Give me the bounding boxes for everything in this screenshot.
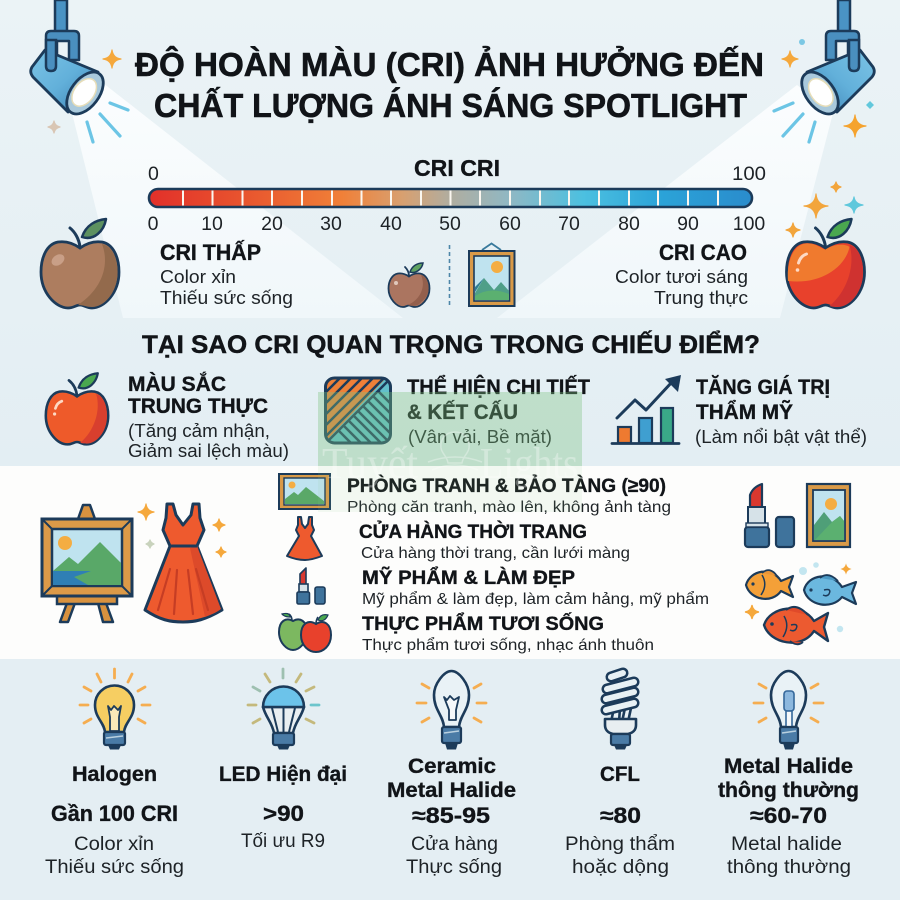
- icon: sparkles left: [48, 50, 121, 133]
- bulb: Ceramic Metal Halide: Ceramic: [408, 755, 496, 778]
- icon: blue fish: [804, 575, 856, 605]
- row: galleries and museums: [279, 473, 671, 516]
- title: [135, 45, 764, 124]
- icon: green and red apples: [279, 613, 331, 652]
- dashed divider: [448, 245, 450, 308]
- bulb: CFL: Phòng thẩm: [565, 834, 675, 855]
- icon: rising bar chart: [612, 375, 681, 444]
- bulb: Halogen: [45, 669, 184, 878]
- bulb: Ceramic Metal Halide: Metal Halide: [387, 779, 516, 802]
- scale tick labels: [148, 213, 765, 235]
- bulb: Halogen: Color xỉn: [74, 834, 154, 855]
- light beam left: [72, 83, 403, 318]
- row: galleries and museums: Phòng căn tranh, mào lên, không ảnh tàng: [347, 499, 671, 516]
- bulb: CFL: hoặc dộng: [572, 857, 669, 878]
- bulb: standard Metal Halide: ≈60-70: [750, 803, 827, 828]
- bulb: Ceramic Metal Halide: Cửa hàng: [411, 834, 498, 855]
- reason: aesthetic value text: [695, 376, 867, 447]
- background: applications band: [0, 466, 900, 659]
- icon: small lipstick set: [297, 568, 325, 604]
- icon: red fish: [764, 607, 828, 644]
- row: fashion stores: Cửa hàng thời trang, cần lưới màng: [361, 545, 630, 562]
- CRI gradient bar: [149, 189, 752, 207]
- icon: light rays right: [774, 103, 815, 142]
- icon: small dress: [287, 517, 322, 560]
- bulb: Ceramic Metal Halide: ≈85-95: [412, 803, 490, 828]
- icon: landscape frame: [279, 474, 330, 509]
- scale tick labels: 60: [499, 213, 521, 235]
- bulb: Halogen: Gần 100 CRI: [51, 801, 178, 826]
- icon: dull brown apple: [41, 219, 119, 308]
- icon: red dress: [145, 504, 222, 622]
- bulb: Ceramic Metal Halide: Thực sống: [406, 857, 502, 878]
- row: fresh food: [279, 611, 654, 654]
- icon: small apple: [388, 263, 430, 307]
- scale minimum label: 0: [148, 163, 159, 185]
- icon: painting on easel: [42, 505, 132, 622]
- high CRI text: Color tươi sáng: [615, 267, 748, 287]
- reason: detail and texture text: (Vân vải, Bề mặt): [408, 427, 552, 447]
- bulb: modern LED: >90: [263, 801, 304, 826]
- scale tick labels: 20: [261, 213, 283, 235]
- reason: true colors text: Giảm sai lệch màu): [128, 441, 289, 461]
- reason: true colors text: MÀU SẮC: [128, 372, 226, 396]
- scale tick labels: 0: [148, 213, 159, 235]
- row: fashion stores: CỬA HÀNG THỜI TRANG: [359, 519, 587, 543]
- icon: lipstick: [745, 484, 794, 547]
- icon: easel sparkles: [138, 504, 226, 557]
- icon: portrait frame: [807, 484, 850, 547]
- low CRI text: [160, 240, 293, 308]
- background: bulb comparison panel: [0, 659, 900, 900]
- row: fresh food: THỰC PHẨM TƯƠI SỐNG: [362, 611, 604, 635]
- bulb: standard Metal Halide: Metal halide: [731, 834, 842, 855]
- watermark: Tuyết Lights: Lights: [480, 439, 578, 488]
- icon: LED bulb: [248, 669, 319, 750]
- icon: sparkles right: [782, 39, 874, 137]
- icon: texture swatch: [325, 378, 391, 444]
- icon: vivid red apple: [786, 219, 864, 308]
- low CRI text: Color xỉn: [160, 267, 236, 287]
- light beam right: [497, 85, 833, 318]
- title: CHẤT LƯỢNG ÁNH SÁNG SPOTLIGHT: [154, 87, 747, 124]
- scale tick labels: 40: [380, 213, 402, 235]
- bulb: standard Metal Halide: thông thường: [718, 779, 859, 802]
- high CRI text: [615, 240, 748, 308]
- icon: CFL spiral bulb: [605, 673, 636, 750]
- scale tick labels: 80: [618, 213, 640, 235]
- icon: ceramic metal halide bulb: [417, 671, 486, 750]
- row: fresh food: Thực phẩm tươi sống, nhạc ánh thuôn: [362, 636, 654, 654]
- icon: apple sparkles: [786, 182, 863, 237]
- bulb: modern LED: [219, 669, 347, 852]
- scale heading: CRI CRI: [414, 155, 500, 181]
- icon: halogen bulb: [80, 669, 150, 750]
- scale tick labels: 70: [558, 213, 580, 235]
- reason: true colors text: [128, 372, 289, 461]
- scale tick labels: 30: [320, 213, 342, 235]
- bulb: Halogen: Thiếu sức sống: [45, 857, 184, 878]
- scale tick labels: 50: [439, 213, 461, 235]
- bulb: modern LED: LED Hiện đại: [219, 763, 347, 786]
- scale tick labels: 100: [733, 213, 765, 235]
- bulb: standard Metal Halide: [718, 671, 859, 878]
- reason: true colors text: (Tăng cảm nhận,: [128, 421, 270, 441]
- row: fashion stores: [287, 517, 630, 562]
- watermark: Tuyết Lights: [318, 392, 582, 512]
- icon: spotlight left: [31, 0, 111, 121]
- reason: aesthetic value text: TĂNG GIÁ TRỊ: [696, 376, 830, 399]
- icon: spotlight right: [794, 0, 874, 121]
- icon: light rays left: [87, 103, 128, 142]
- bulb: Halogen: Halogen: [72, 763, 157, 786]
- icon: red apple: [46, 373, 108, 444]
- icon: orange fish: [746, 570, 793, 599]
- bulb: standard Metal Halide: thông thường: [727, 857, 851, 878]
- reason: detail and texture text: [407, 375, 590, 447]
- row: galleries and museums: PHÒNG TRANH & BẢO TÀNG (≥90): [347, 473, 666, 497]
- reason: true colors text: TRUNG THỰC: [128, 395, 268, 418]
- bulb: Ceramic Metal Halide: [387, 671, 516, 878]
- icon: framed picture: [469, 244, 514, 306]
- high CRI text: CRI CAO: [659, 240, 747, 265]
- row: cosmetics: MỸ PHẨM & LÀM ĐẸP: [362, 566, 575, 589]
- bulb: standard Metal Halide: Metal Halide: [724, 755, 853, 778]
- low CRI text: Thiếu sức sống: [160, 288, 293, 308]
- watermark: Tuyết Lights: Tuyết: [322, 439, 418, 488]
- reason: aesthetic value text: (Làm nổi bật vật thể): [695, 427, 867, 447]
- scale maximum label: 100: [732, 163, 766, 185]
- background: top panel: [0, 0, 900, 466]
- icon: metal halide bulb: [754, 671, 823, 750]
- bulb: CFL: [565, 673, 675, 878]
- reason: detail and texture text: & KẾT CẤU: [407, 401, 518, 424]
- section heading: why CRI matters: TẠI SAO CRI QUAN TRỌNG TRONG CHIẾU ĐIỂM?: [142, 330, 760, 359]
- reason: detail and texture text: THỂ HIỆN CHI TIẾT: [407, 375, 590, 399]
- low CRI text: CRI THẤP: [160, 240, 261, 265]
- row: cosmetics: [297, 566, 709, 608]
- scale tick labels: 90: [677, 213, 699, 235]
- bulb: CFL: CFL: [600, 763, 640, 786]
- title: ĐỘ HOÀN MÀU (CRI) ẢNH HƯỞNG ĐẾN: [135, 45, 764, 83]
- scale tick labels: 10: [201, 213, 223, 235]
- bulb: CFL: ≈80: [600, 803, 641, 828]
- high CRI text: Trung thực: [654, 288, 748, 308]
- icon: fish sparkles and bubbles: [745, 562, 850, 632]
- row: cosmetics: Mỹ phẩm & làm đẹp, làm cảm hảng, mỹ phẩm: [362, 590, 709, 608]
- reason: aesthetic value text: THẨM MỸ: [696, 401, 793, 424]
- bulb: modern LED: Tối ưu R9: [241, 831, 325, 852]
